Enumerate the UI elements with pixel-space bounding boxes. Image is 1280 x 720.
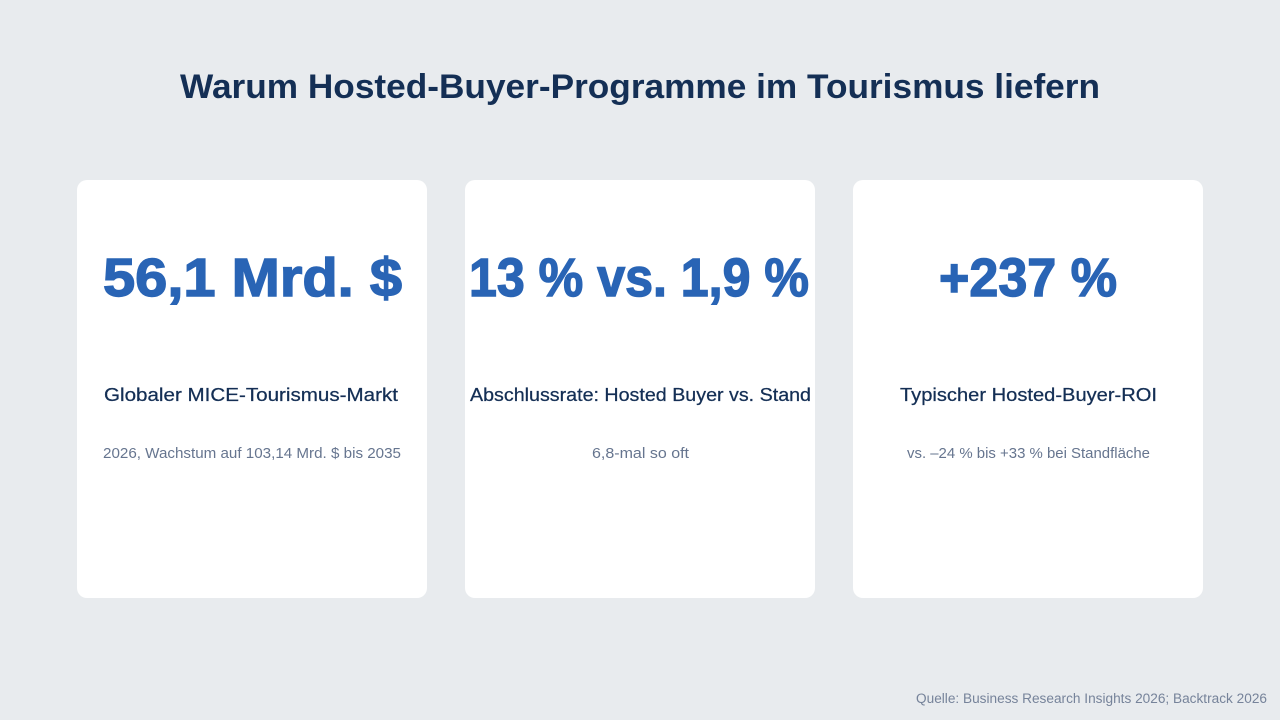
stat: closing rates: 13 % vs. 1,9 % (469, 248, 809, 308)
panel: closing rate (465, 180, 815, 598)
label: ROI: Typischer Hosted-Buyer-ROI (900, 384, 1157, 405)
note: closing multiple: 6,8-mal so oft (592, 446, 689, 462)
source note: Quelle: Business Research Insights 2026; Backtrack 2026 (916, 691, 1267, 706)
panel: ROI (853, 180, 1203, 598)
note: ROI comparison: vs. –24 % bis +33 % bei Standfläche (907, 446, 1150, 462)
panel: MICE market (77, 180, 427, 598)
title: Warum Hosted-Buyer-Programme im Tourismus liefern (180, 68, 1100, 106)
stat: market size: 56,1 Mrd. $ (103, 248, 402, 308)
label: market: Globaler MICE-Tourismus-Markt (104, 384, 398, 405)
stat: ROI: +237 % (939, 248, 1117, 308)
note: market growth: 2026, Wachstum auf 103,14 Mrd. $ bis 2035 (103, 446, 401, 462)
label: closing rate: Abschlussrate: Hosted Buyer vs. Stand (470, 384, 811, 405)
